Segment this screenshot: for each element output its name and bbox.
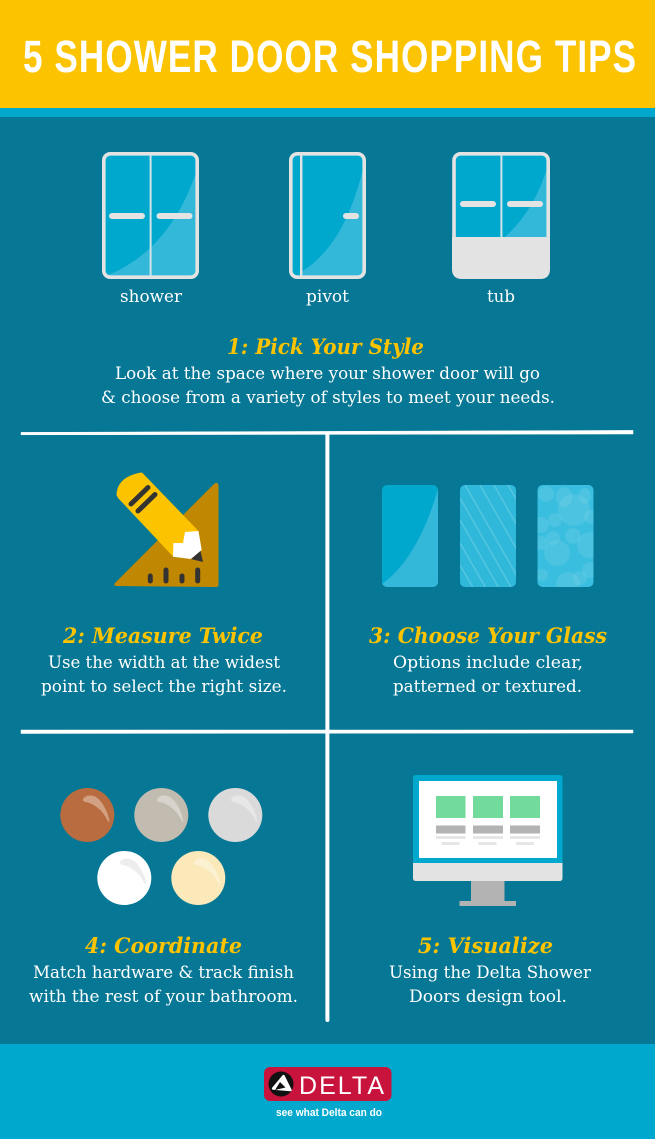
icon: patterned glass <box>460 485 516 587</box>
text block 2 <box>41 653 287 697</box>
label: shower: shower <box>120 287 183 307</box>
icon: copper finish <box>60 788 114 842</box>
icon: pencil and set square <box>114 472 218 587</box>
panel: coordinate <box>29 788 298 1007</box>
text block 1: & choose from a variety of styles to meet your needs. <box>101 388 555 408</box>
panel: visualize <box>389 775 592 1007</box>
heading 2: 2: Measure Twice <box>62 623 263 648</box>
heading 1: 1: Pick Your Style <box>227 334 424 359</box>
text block 1: Look at the space where your shower door will go <box>115 364 540 384</box>
text block 5: Doors design tool. <box>409 987 567 1007</box>
icon: textured glass <box>538 485 594 587</box>
icon: pivot door <box>291 154 364 277</box>
icon: tub door <box>452 154 550 279</box>
label: tub: tub <box>487 287 515 307</box>
heading 4: 4: Coordinate <box>85 933 242 958</box>
logo: Delta <box>264 1067 392 1101</box>
text block 1 <box>101 364 555 408</box>
heading 5: 5: Visualize <box>418 933 553 958</box>
footer band <box>0 1044 655 1139</box>
icon: nickel finish <box>134 788 188 842</box>
icon: shower door <box>104 154 197 277</box>
title: 5 SHOWER DOOR SHOPPING TIPS <box>23 31 636 82</box>
text block 2: Use the width at the widest <box>48 653 280 673</box>
text block 3: Options include clear, <box>393 653 583 673</box>
grid dividers <box>21 430 633 1022</box>
text block 5: Using the Delta Shower <box>389 963 592 983</box>
icon: white finish <box>97 851 151 905</box>
text block 4: with the rest of your bathroom. <box>29 987 298 1007</box>
text block 5 <box>389 963 592 1007</box>
icon: cream finish <box>171 851 225 905</box>
icon: computer monitor <box>413 775 562 906</box>
icon: clear glass <box>382 485 438 587</box>
text block 3: patterned or textured. <box>393 677 582 697</box>
heading 3: 3: Choose Your Glass <box>369 623 607 648</box>
icon: chrome finish <box>208 788 262 842</box>
text block 4: Match hardware & track finish <box>33 963 294 983</box>
label: pivot: pivot <box>306 287 349 307</box>
text block 4 <box>29 963 298 1007</box>
logo tagline: see what Delta can do <box>276 1107 382 1119</box>
panel: pick your style <box>101 154 555 408</box>
logo: Delta: DELTA <box>299 1072 384 1100</box>
text block 2: point to select the right size. <box>41 677 287 697</box>
panel: choose your glass <box>369 485 607 697</box>
panel: measure twice <box>41 472 287 697</box>
text block 3 <box>393 653 583 697</box>
header band <box>0 0 655 117</box>
